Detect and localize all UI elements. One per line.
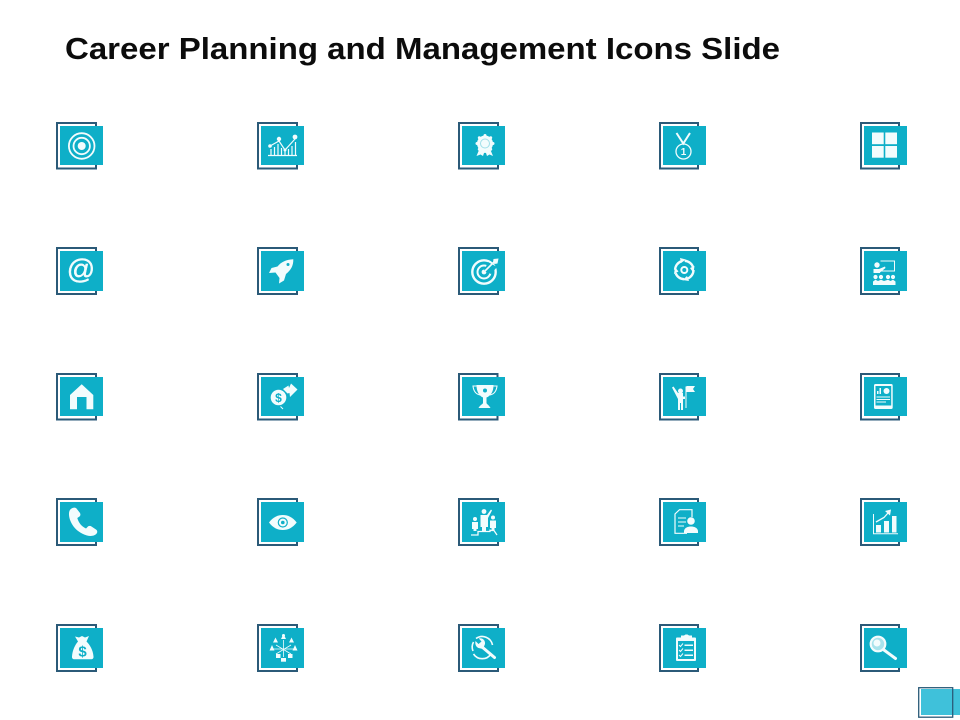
icon: line and bar chart <box>258 123 304 168</box>
icon: eye <box>258 499 304 545</box>
icon: people on podium <box>459 499 505 545</box>
icon: at sign: @ <box>67 254 95 284</box>
slide number tab <box>919 688 960 717</box>
icon: dollar coin with arrow: $ <box>275 391 282 405</box>
icon: person raising flag <box>660 374 706 420</box>
icon: teacher and audience <box>861 248 907 294</box>
icon: money bag <box>57 625 103 671</box>
icon: resume document with person <box>660 499 706 545</box>
icon: at sign <box>57 248 103 294</box>
icon: wrench in circular arrows <box>459 625 505 671</box>
icon: four window tiles <box>861 123 907 168</box>
icon: home <box>57 374 103 420</box>
icon: rocket <box>258 248 304 294</box>
icon: trophy <box>459 374 505 420</box>
icon: checklist clipboard <box>660 625 706 671</box>
icon: tablet report <box>861 374 907 420</box>
icon: people network hub <box>258 625 304 671</box>
icon: award rosette <box>459 123 505 168</box>
icon: magnifying glass <box>861 625 907 671</box>
icon: concentric target <box>57 123 103 168</box>
icon: gear with cycle arrows <box>660 248 706 294</box>
icon: growth bar chart <box>861 499 907 545</box>
icon: phone handset <box>57 499 103 545</box>
icon: medal number one: 1 <box>681 147 687 158</box>
icon: dollar coin with arrow <box>258 374 304 420</box>
icon: medal number one <box>660 123 706 168</box>
title: Career Planning and Management Icons Slide <box>65 31 780 66</box>
icon: target with dart <box>459 248 505 294</box>
icon: money bag: $ <box>78 644 87 660</box>
